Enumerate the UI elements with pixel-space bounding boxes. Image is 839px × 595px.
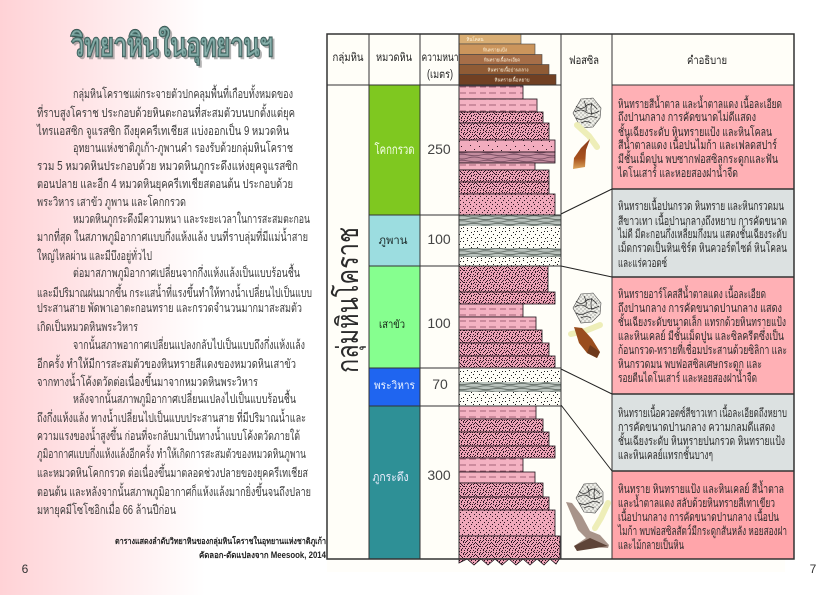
formation: Phu Phan: ภูพาน <box>378 235 408 247</box>
body text: พระวิหาร เสาขัว ภูพาน และโคกกรวด <box>37 194 186 210</box>
connector lines <box>561 189 612 471</box>
page background gradient <box>0 0 205 595</box>
body text: ใหญ่ไหลผ่าน และมีบึงอยู่ทั่วไป <box>37 247 152 264</box>
strat column: Phu Phan layers <box>459 215 561 266</box>
body text: รวม 5 หมวดหินประกอบด้วย หมวดหินภูกระดึงแห่งยุคจูแรสซิก <box>37 159 298 174</box>
description: Phra Wihan <box>612 394 794 471</box>
formation: Phra Wihan <box>369 368 448 406</box>
strat column: Sao Khua layers <box>459 266 555 368</box>
header labels: ความหนา <box>422 52 458 64</box>
description: Sao Khua: และหินเคลย์ มีชั้นเม็ดปูน และซิลครีตซึ่งเป็น <box>618 327 784 344</box>
rock legend: หินทรายเนื้อละเอียด <box>484 54 520 64</box>
body text: อุทยานแห่งชาติภูเก้า-ภูพานคำ รองรับด้วยกลุ่มหินโคราช <box>73 140 293 156</box>
formation: Phu Kradueng <box>369 406 451 559</box>
body text: หมวดหินภูกระดึงมีความหนา และระยะเวลาในการสะสมตะกอน <box>73 212 310 227</box>
title: วิทยาหินในอุทยานฯ <box>71 27 273 65</box>
description: Khok Kruat: ถึงปานกลาง การคัดขนาดไม่ดีแสดง <box>618 110 756 124</box>
body text: จากนั้นสภาพอากาศเปลี่ยนแปลงกลับไปเป็นแบบถึงกึ่งแห้งแล้ง <box>73 335 305 352</box>
strat column: Phra Wihan layers <box>459 369 561 405</box>
rock legend: หินทรายเนื้อหยาบ <box>494 74 530 84</box>
table grid <box>327 34 794 559</box>
icon: fossils group 3 <box>566 483 609 551</box>
strat column: Phu Kradueng layers <box>459 406 560 565</box>
rock legend: หินโคลน <box>466 36 484 43</box>
description: Khok Kruat <box>612 85 794 189</box>
rock legend: หินทรายเนื้อปานกลาง <box>488 64 529 74</box>
description: Phu Phan: และแร่ควอตซ์ <box>618 256 667 270</box>
title: วิทยาหินในอุทยานฯ <box>71 27 273 65</box>
stratigraphic table <box>327 34 794 572</box>
description: Khok Kruat: สีน้ำตาลแดง เนื้อปนไมก้า และเฟลดสปาร์ <box>618 136 777 152</box>
header labels: ฟอสซิล <box>569 54 599 67</box>
body text: จากทางน้ำโค้งตวัดต่อเนื่องขึ้นมาจากหมวดหินพระวิหาร <box>37 372 258 389</box>
body text: หลังจากนั้นสภาพภูมิอากาศเปลี่ยนแปลงไปเป็นแบบร้อนชื้น <box>73 389 296 407</box>
body text: และหมวดหินโคกกรวด ต่อเนื่องขึ้นมาตลอดช่วงปลายของยุคครีเทเชียส <box>37 463 308 481</box>
body text: ประสานสาย พัดพาเอาตะกอนทราย และกรวดจำนวนมากมาสะสมตัว <box>37 301 302 315</box>
icon: fossils group 1 <box>573 98 601 169</box>
description: Sao Khua: รอยตีนไดโนเสาร์ และหอยสองฝาน้ำจืด <box>618 369 757 385</box>
header labels: กลุ่มหิน <box>332 51 364 64</box>
header labels: คำอธิบาย <box>687 54 727 67</box>
body text: อีกครั้ง ทำให้มีการสะสมตัวของหินทรายสีแดงของหมวดหินเสาขัว <box>37 354 296 371</box>
title <box>71 27 275 67</box>
body text: ถึงกึ่งแห้งแล้ง ทางน้ำเปลี่ยนไปเป็นแบบประสานสาย ที่มีปริมาณน้ำและ <box>37 408 306 425</box>
description: Sao Khua: หินกรวดมน พบฟอสซิลเศษกระดูก และ <box>618 357 762 372</box>
body text: ที่ราบสูงโคราช ประกอบด้วยหินตะกอนที่สะสมตัวบนบกตั้งแต่ยุค <box>37 103 295 121</box>
source credit: ตารางแสดงลำดับวิทยาหินของกลุ่มหินโคราชในอุทยานแห่งชาติภูเก้า <box>115 535 326 547</box>
rock legend: หินทรายแป้ง <box>483 46 507 54</box>
body text: ความแรงของน้ำสูงขึ้น ก่อนที่จะกลับมาเป็นทางน้ำแบบโค้งตวัดภายใต้ <box>37 426 300 444</box>
description: Sao Khua <box>612 277 794 394</box>
source credit <box>115 535 326 560</box>
formation: Sao Khua <box>369 266 451 368</box>
body text: มหายุคมีโซโซอิกเมื่อ 66 ล้านปีก่อน <box>37 501 176 518</box>
description: Khok Kruat: ไดโนเสาร์ และหอยสองฝาน้ำจืด <box>617 164 738 180</box>
formation: Phra Wihan: 70 <box>432 376 448 392</box>
body text: มากที่สุด ในสภาพภูมิอากาศแบบกึ่งแห้งแล้ง บนที่ราบลุ่มที่มีแม่น้ำสาย <box>37 227 308 245</box>
description: Sao Khua: หินทรายอาร์โคสสีน้ำตาลแดง เนื้อละเอียด <box>618 285 766 301</box>
page number left: 6 <box>22 562 29 576</box>
title: วิทยาหินในอุทยานฯ <box>73 29 275 67</box>
group label: Khorat Group: กลุ่มหินโคราช <box>330 227 367 373</box>
formation: Phu Kradueng: ภูกระดึง <box>372 470 408 485</box>
body text: กลุ่มหินโคราชแผ่กระจายตัวปกคลุมพื้นที่เกือบทั้งหมดของ <box>73 84 293 102</box>
description: Sao Khua: ถึงปานกลาง การคัดขนาดปานกลาง แสดง <box>618 301 782 315</box>
description: Phra Wihan: การคัดขนาดปานกลาง ความกลมดีแสดง <box>618 420 775 434</box>
description: Phra Wihan: และหินเคลย์แทรกชั้นบางๆ <box>618 446 713 462</box>
body text: เกิดเป็นหมวดหินพระวิหาร <box>37 319 138 334</box>
header labels: (เมตร) <box>427 69 453 81</box>
formation: Khok Kruat <box>369 85 451 215</box>
description: Khok Kruat: มีชั้นเม็ดปูน พบซากฟอสซิลกระดูกและฟัน <box>618 150 778 167</box>
strat column: Khok Kruat layers <box>459 86 555 215</box>
rock legend <box>459 34 556 85</box>
formation: Phu Phan <box>369 215 451 266</box>
body text: ภูมิอากาศแบบกึ่งแห้งแล้งอีกครั้ง ทำให้เกิดการสะสมตัวของหมวดหินภูพาน <box>37 444 306 462</box>
formation: Sao Khua: 100 <box>427 315 451 331</box>
header labels: หมวดหิน <box>376 51 412 64</box>
body text: ไทรแอสซิก จูแรสซิก ถึงยุคครีเทเชียส แบ่งออกเป็น 9 หมวดหิน <box>36 123 289 139</box>
formation: Phra Wihan: พระวิหาร <box>374 380 415 392</box>
formation: Phu Phan: 100 <box>427 231 451 247</box>
body text: ต่อมาสภาพภูมิอากาศเปลี่ยนจากกึ่งแห้งแล้งเป็นแบบร้อนชื้น <box>73 263 300 281</box>
description: Phu Phan <box>612 189 794 277</box>
description: Khok Kruat: ชั้นเฉียงระดับ หินทรายแป้ง และหินโคลน <box>618 123 772 139</box>
body text: และมีปริมาณฝนมากขึ้น กระแสน้ำที่แรงขึ้นทำให้ทางน้ำเปลี่ยนไปเป็นแบบ <box>37 283 312 300</box>
description: Phu Kradueng <box>612 471 794 559</box>
description: Phu Kradueng: และไม้กลายเป็นหิน <box>618 537 684 552</box>
formation: Khok Kruat: โคกกรวด <box>374 142 414 157</box>
body text: ตอนปลาย และอีก 4 หมวดหินยุคครีเทเชียสตอนต้น ประกอบด้วย <box>37 177 293 192</box>
formation: Khok Kruat: 250 <box>427 141 451 157</box>
page number right: 7 <box>810 562 817 576</box>
formation: Sao Khua: เสาขัว <box>379 319 405 331</box>
header labels <box>332 51 727 81</box>
icon: fossils group 2 <box>571 293 601 358</box>
source credit: คัดลอก-ดัดแปลงจาก Meesook, 2014 <box>199 550 326 560</box>
body text: ตอนต้น และหลังจากนั้นสภาพภูมิอากาศก็แห้งแล้งมากยิ่งขึ้นจนถึงปลาย <box>37 482 311 500</box>
formation: Phu Kradueng: 300 <box>427 467 451 483</box>
body text <box>36 84 312 518</box>
description: Phu Kradueng: และน้ำตาลแดง สลับด้วยหินทรายสีเทาเขียว <box>618 494 775 510</box>
